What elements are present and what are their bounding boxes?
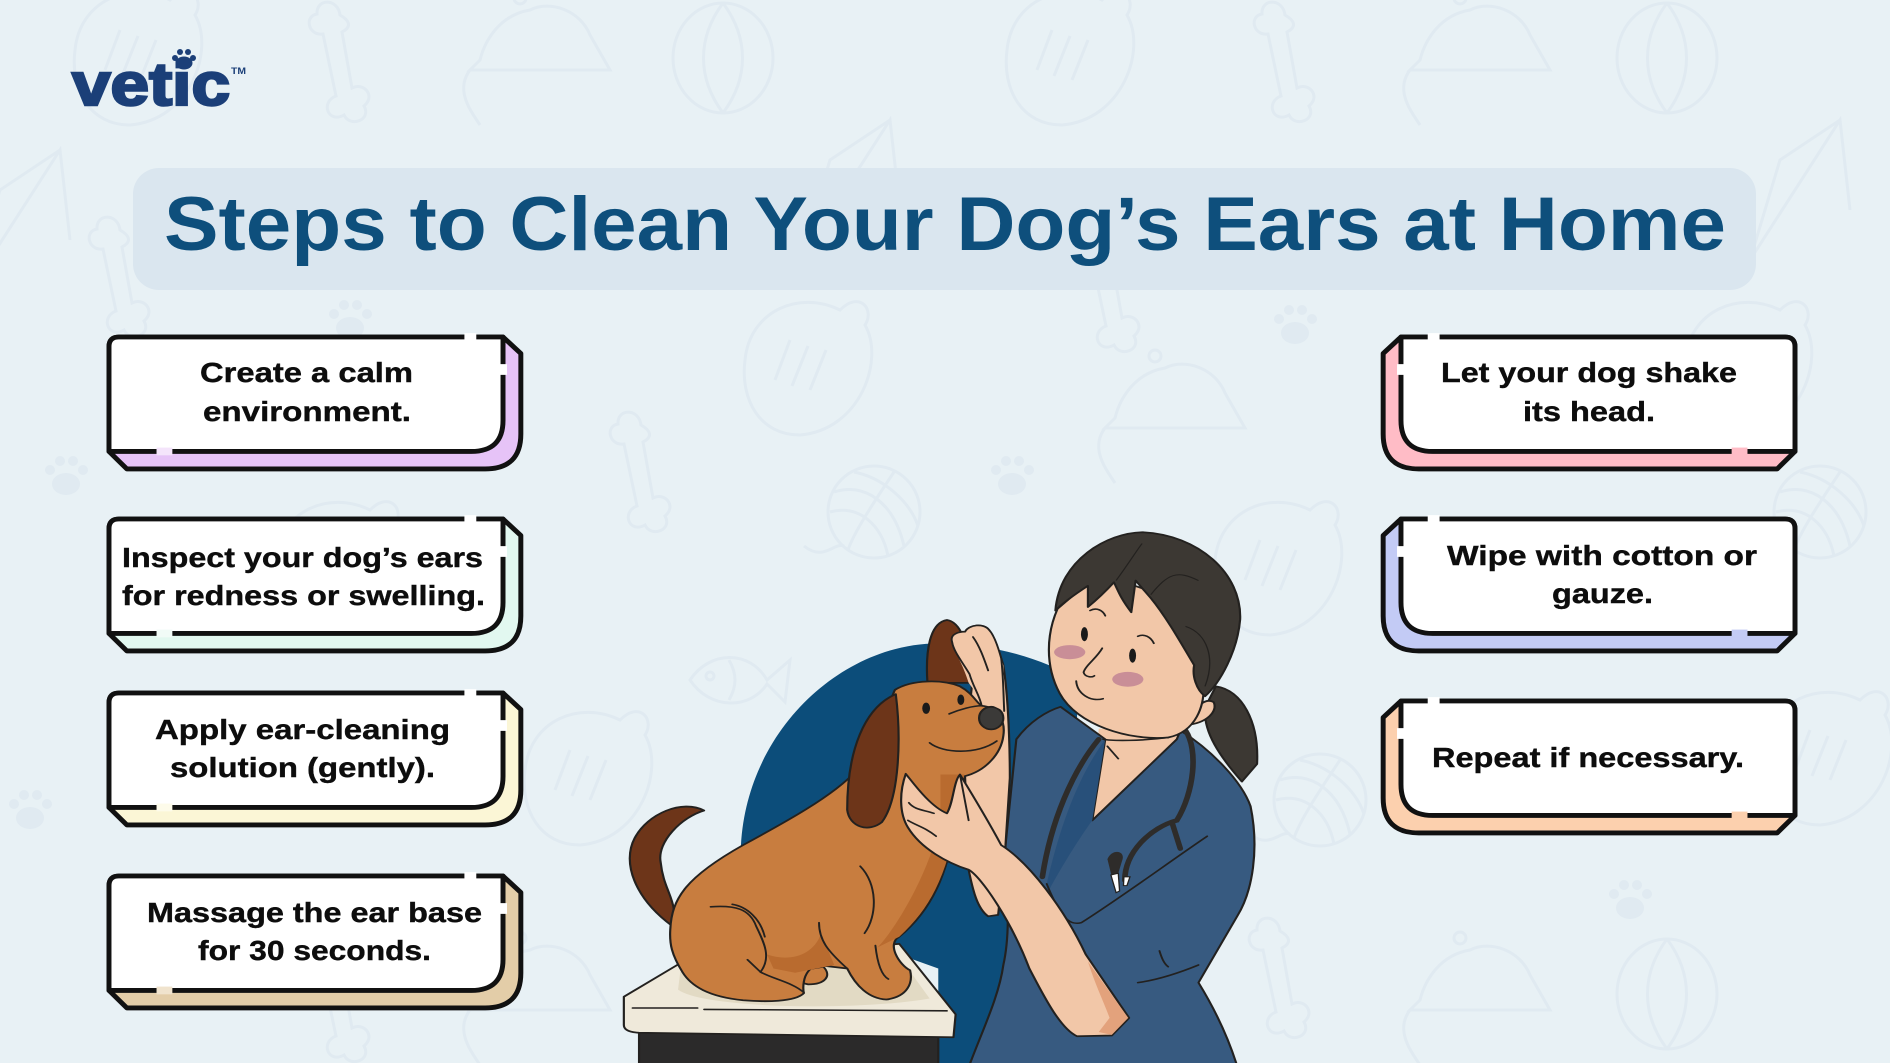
step card: apply solution: Apply ear-cleaning xyxy=(155,714,450,745)
step card: wipe with cotton xyxy=(1383,519,1795,651)
raised arm xyxy=(952,625,1010,916)
stethoscope xyxy=(1042,730,1193,880)
dog xyxy=(630,620,1004,1001)
face features xyxy=(1054,609,1168,759)
body and head xyxy=(670,681,1004,1001)
illustration: vet cleaning dog's ears xyxy=(624,532,1257,1063)
step card: massage ear base: Massage the ear base xyxy=(147,897,482,928)
stethoscope earpieces xyxy=(1107,852,1130,893)
droopy ear xyxy=(847,694,899,828)
belly shade xyxy=(767,933,834,973)
ear xyxy=(1185,701,1215,725)
chest shade xyxy=(878,775,964,947)
dog eyes and nose xyxy=(922,694,1003,729)
step card: let dog shake head xyxy=(1383,337,1795,469)
step card: repeat: Repeat if necessary. xyxy=(1432,742,1744,773)
dog linework xyxy=(711,706,997,992)
nurse body xyxy=(952,532,1257,1063)
raised ear xyxy=(927,620,971,683)
step card: wipe with cotton: gauze. xyxy=(1552,578,1653,609)
nurse hands and arm xyxy=(901,625,1129,1036)
title banner xyxy=(133,168,1756,290)
logo: vetic: TM xyxy=(231,66,246,76)
collar shade xyxy=(1047,739,1105,894)
title banner: Steps to Clean Your Dog’s Ears at Home xyxy=(164,182,1726,267)
hair highlight lines xyxy=(1116,544,1210,686)
step card: apply solution xyxy=(109,693,521,825)
back foot xyxy=(791,967,827,984)
step card: apply solution: solution (gently). xyxy=(170,752,435,783)
blue arch backdrop xyxy=(741,643,1077,1063)
ponytail xyxy=(1205,686,1257,782)
table xyxy=(624,944,956,1063)
step card: inspect ears: for redness or swelling. xyxy=(122,580,485,611)
face xyxy=(1049,573,1204,738)
step card: create a calm environment xyxy=(109,337,521,469)
neck xyxy=(1090,729,1185,827)
step card: repeat xyxy=(1383,701,1795,833)
logo: vetic: vetic xyxy=(72,51,230,118)
main arm and hand xyxy=(901,774,1129,1036)
upper hand over ear xyxy=(952,625,1004,711)
tail xyxy=(630,807,704,925)
step card: create a calm environment: environment. xyxy=(203,396,411,427)
step card: create a calm environment: Create a calm xyxy=(200,357,413,388)
step card: let dog shake head: its head. xyxy=(1523,396,1655,427)
finger lines xyxy=(908,775,969,836)
step card: massage ear base xyxy=(109,876,521,1008)
hair xyxy=(1055,532,1240,696)
scrub linework xyxy=(1047,836,1207,983)
scrub top xyxy=(969,707,1254,1063)
arm shade xyxy=(1088,961,1128,1035)
step card: let dog shake head: Let your dog shake xyxy=(1441,357,1737,388)
step card: inspect ears: Inspect your dog’s ears xyxy=(122,542,483,573)
step card: wipe with cotton: Wipe with cotton or xyxy=(1447,540,1757,571)
step card: massage ear base: for 30 seconds. xyxy=(198,935,431,966)
icon: paw xyxy=(172,49,196,70)
step card: inspect ears xyxy=(109,519,521,651)
